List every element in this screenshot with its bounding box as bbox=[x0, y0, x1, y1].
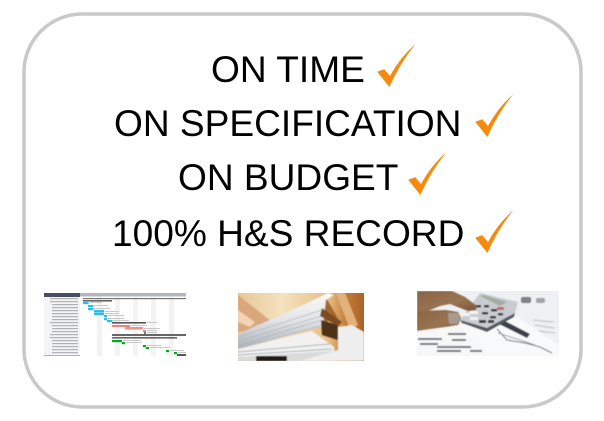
binder clip bbox=[321, 320, 338, 340]
calculator body bbox=[460, 293, 518, 328]
upper stack bbox=[238, 293, 334, 349]
left paper with figures bbox=[417, 324, 490, 356]
heading: on time: ON TIME bbox=[211, 48, 365, 90]
heading: on budget: ON BUDGET bbox=[178, 156, 398, 198]
icon: check mark 2 bbox=[475, 94, 513, 137]
index finger bbox=[417, 291, 477, 311]
bright sheets lower right bbox=[300, 325, 364, 361]
hand behind the stack bbox=[238, 295, 272, 332]
right paper with line chart bbox=[465, 314, 558, 356]
icon: check mark 4 bbox=[475, 210, 513, 253]
heading: health and safety record: 100% H&S RECORD bbox=[112, 212, 464, 254]
icon: check mark 1 bbox=[377, 44, 415, 87]
image: calculator and financial papers bbox=[417, 291, 559, 356]
heading: on specification: ON SPECIFICATION bbox=[114, 102, 461, 144]
lower stack bbox=[238, 331, 334, 359]
image: stacked paper files bbox=[238, 293, 364, 361]
image: gantt chart bbox=[44, 293, 186, 356]
icon: check mark 3 bbox=[408, 152, 446, 195]
thumb nail bbox=[448, 313, 460, 324]
thumb bbox=[417, 310, 461, 331]
